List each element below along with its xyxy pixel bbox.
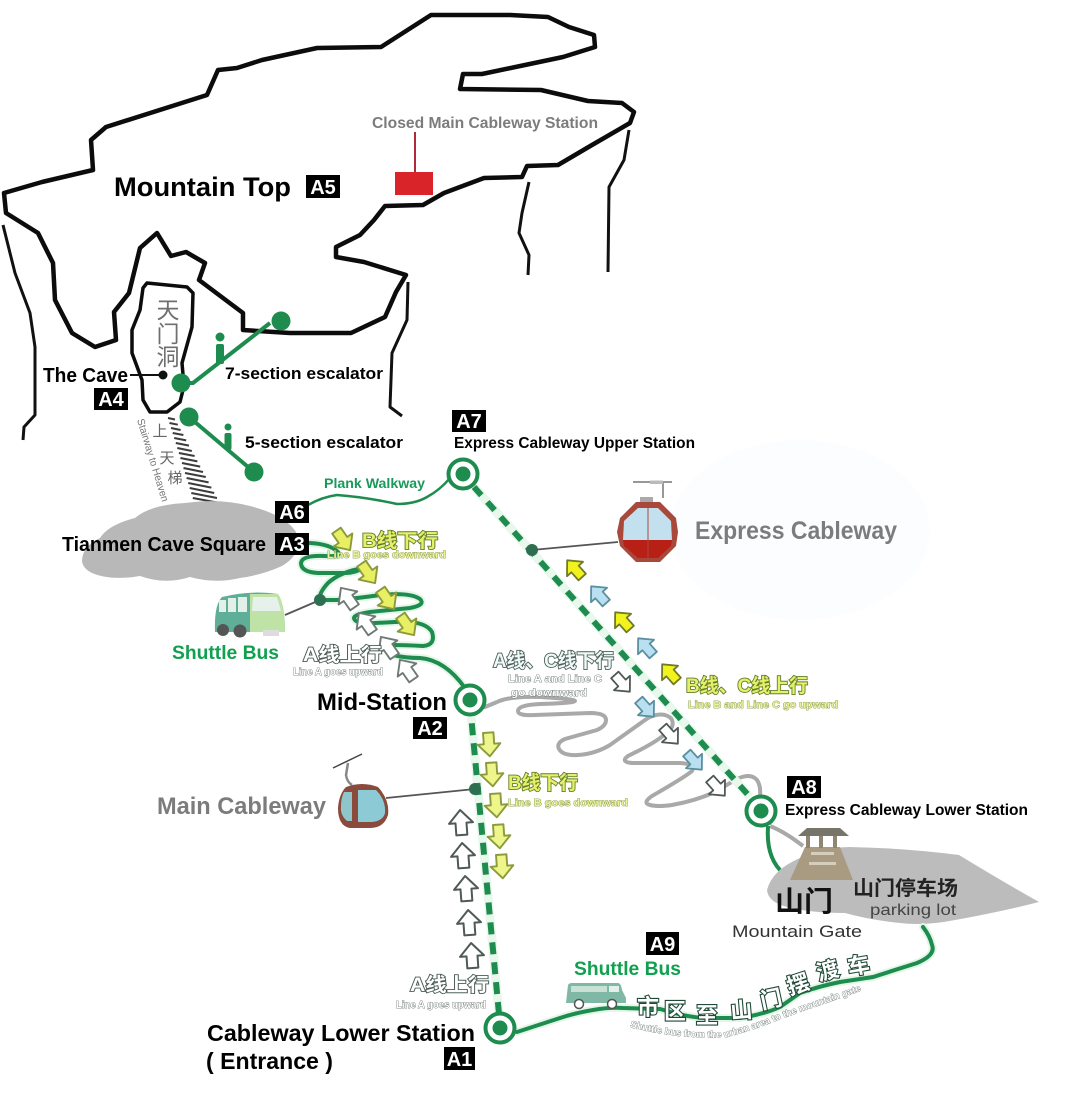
label: mid-station: Mid-Station [317,689,447,716]
arrows: line B downward, main cableway [477,732,514,879]
main gondola connector [386,783,481,798]
plank walkway path [308,478,450,505]
route label: line B down, lower [508,772,628,809]
route label: line A up, upper [293,644,383,678]
arrows: lines B and C upward, express cableway [559,553,685,688]
arrows: line B downward, upper road [327,524,423,642]
gray path to mountain gate [770,826,803,846]
label: mountain gate chinese: 山门 [775,886,833,917]
label: 5-section escalator: 5-section escalator [245,433,403,452]
arrows: line A upward, main cableway [448,809,485,969]
tianmen square cloud [82,501,298,581]
badge: A5: A5 [310,177,336,199]
station: A1 [486,1014,514,1042]
route label: line B down, upper: Line B goes downward [327,550,446,561]
station: A7 [448,460,478,488]
label: closed main cableway station: Closed Main Cableway Station [372,115,598,132]
7-section escalator [172,312,290,392]
route label: lines A and C down: Line A and Line C [508,674,602,685]
route label: line A up, lower [396,974,489,1011]
route label: lines B and C up [686,675,838,711]
express cableway dashed line [474,487,750,797]
express cabin connector [526,542,618,556]
stairway english label: Stairway to Heaven [134,417,171,503]
cave pointer [130,370,168,380]
shuttle bus icon [215,593,285,638]
badge: A3: A3 [279,534,305,556]
label: parking lot english: parking lot [870,902,957,919]
label: shuttle bus upper: Shuttle Bus [172,643,279,664]
parking lot area [767,847,1039,924]
badge: A2: A2 [417,718,443,740]
mountain gate icon [790,828,853,880]
badge: A6: A6 [279,502,305,524]
cave name: 天门洞 [156,297,180,370]
label: mountain top: Mountain Top [114,172,291,202]
route label: lines B and C up: Line B and Line C go upward [688,700,838,711]
route label: shuttle bus english along road: Shuttle bus from the urban area to the mountain gate [630,986,861,1038]
label: 7-section escalator: 7-section escalator [225,364,383,383]
route label: line A up, upper: A线上行 [303,644,382,666]
cliff lines [3,130,629,440]
route label: lines A and C down: go downward [511,688,587,699]
badge: A4: A4 [98,389,125,411]
shuttle bus connector [285,594,326,615]
cave outline [132,283,193,412]
label: tianmen cave square: Tianmen Cave Square [62,534,266,556]
label: parking lot chinese: 山门停车场 [853,876,958,900]
5-section escalator [180,408,264,482]
route label: lines B and C up: B线、C线上行 [686,675,808,697]
badge: A1: A1 [447,1049,472,1071]
station: A2 [456,686,484,714]
green link, A8 to mountain gate [768,826,780,870]
label: express cableway: Express Cableway [695,517,897,545]
label: express cableway upper station: Express Cableway Upper Station [454,435,695,452]
mountain outline [4,15,634,347]
station: A8 [746,796,776,826]
label: the cave: The Cave [43,365,128,387]
green serpentine road, A3 to mid-station [301,543,465,688]
label: entrance: ( Entrance ) [206,1048,333,1074]
express cabin icon [617,480,678,562]
label: cableway lower station: Cableway Lower Station [207,1020,475,1046]
arrows: lines A and C downward, express road [607,668,733,803]
badge: A9: A9 [650,934,675,956]
route label: lines A and C down [493,650,614,699]
route label: lines A and C down: A线、C线下行 [493,650,614,672]
badge: A7: A7 [456,411,482,433]
route label: line B down, upper [327,530,446,561]
arrows: line A upward, upper road [332,581,423,686]
gray road, lines A and C downward [485,697,760,806]
route label: line A up, upper: Line A goes upward [293,667,383,678]
route label: shuttle bus chinese along road: 市区至山门摆渡车 [637,951,872,1028]
main gondola icon [333,754,388,828]
label: express cableway lower station: Express Cableway Lower Station [785,802,1028,819]
badge: A5 [306,175,340,199]
route label: line A up, lower: A线上行 [410,974,489,996]
van icon [566,983,626,1008]
main cableway dashed line [471,715,499,1014]
label: main cableway: Main Cableway [157,793,327,820]
green shuttle road, A1 to parking lot [517,927,933,1032]
route label: line B down, lower: B线下行 [508,772,578,794]
closed station marker [395,132,433,195]
badge: A8: A8 [791,777,817,799]
label: mountain gate english: Mountain Gate [732,922,862,941]
route label: line B down, upper: B线下行 [362,530,438,552]
label: shuttle bus lower: Shuttle Bus [574,959,681,980]
label: plank walkway: Plank Walkway [324,475,425,491]
stairway chinese label: 上天梯 [152,423,183,487]
route label: line A up, lower: Line A goes upward [396,1000,486,1011]
stairway hatch [168,418,220,503]
route label: line B down, lower: Line B goes downward [508,798,628,809]
